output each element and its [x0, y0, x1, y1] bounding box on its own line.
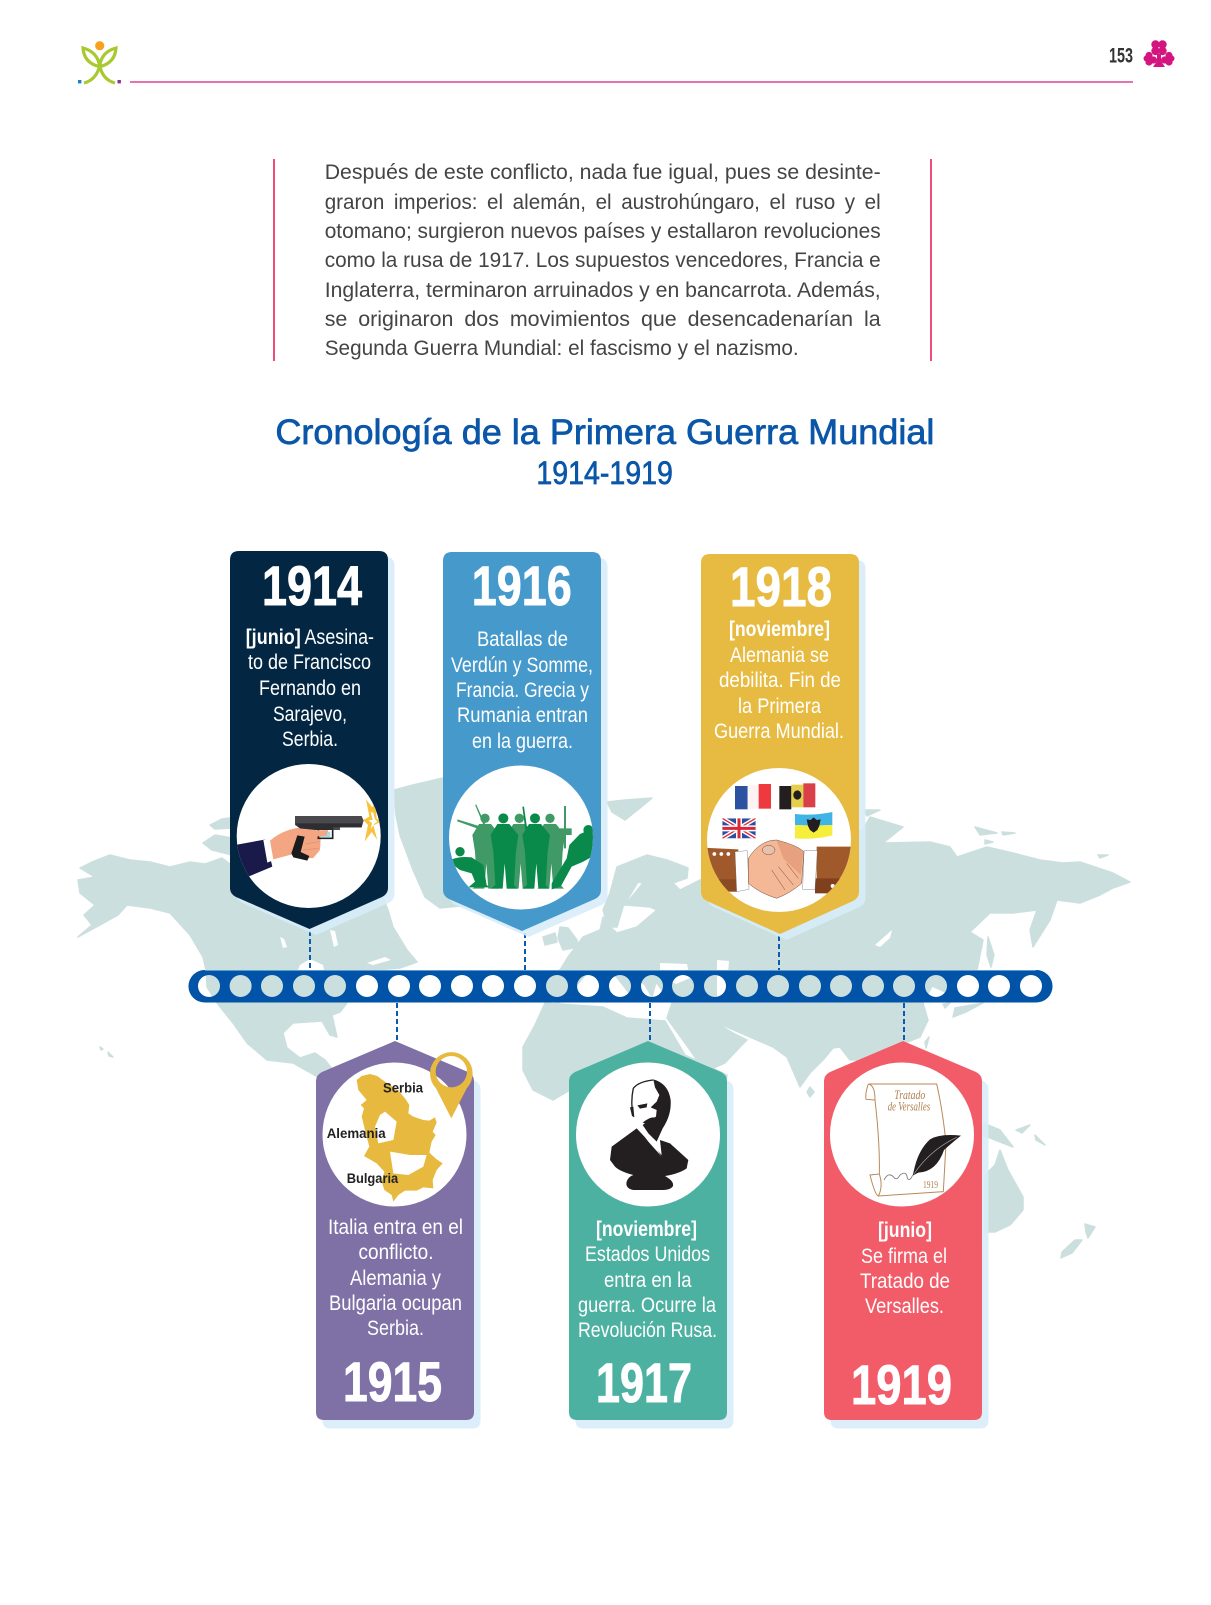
- panel: 1917: [noviembre]: [596, 1218, 697, 1241]
- panel: 1914: [junio]: [246, 626, 301, 649]
- panel: 1917: entra en la: [604, 1269, 692, 1292]
- header rule: [130, 81, 1133, 83]
- panel: 1915: Bulgaria ocupan: [329, 1292, 462, 1315]
- text block with side rules: Segunda Guerra Mundial: el fascismo y el nazismo.: [325, 336, 799, 360]
- icon: map of Serbia with pin: Serbia: [383, 1080, 423, 1096]
- page number: 153: [1109, 44, 1133, 67]
- panel: 1915: Serbia.: [367, 1317, 424, 1340]
- panel: 1917: guerra. Ocurre la: [578, 1294, 716, 1317]
- text block with side rules: graron imperios: el alemán, el austrohúngaro, el ruso y el: [325, 190, 881, 214]
- icon: soldiers silhouette: [452, 804, 595, 889]
- panel: 1919: Tratado de: [860, 1270, 950, 1293]
- icon: map of Serbia with pin: Alemania: [327, 1125, 386, 1141]
- panel: 1915: conflicto.: [358, 1241, 434, 1264]
- panel: 1915: 1915: [343, 1350, 442, 1413]
- icon: program logo: [78, 41, 121, 83]
- panel: 1917: Revolución Rusa.: [578, 1319, 717, 1342]
- panel: 1919: Se firma el: [861, 1245, 947, 1268]
- panel: 1915: [316, 1041, 480, 1428]
- panel: 1918: Guerra Mundial.: [714, 720, 844, 743]
- panel: 1919: [junio]: [878, 1219, 932, 1242]
- icon: treaty scroll with quill: Tratado: [894, 1087, 926, 1102]
- panel: 1916: Francia. Grecia y: [456, 679, 589, 702]
- panel: 1919: 1919: [851, 1353, 952, 1416]
- panel: 1914: to de Francisco: [248, 651, 371, 674]
- icon: treaty scroll with quill: de Versalles: [888, 1099, 930, 1114]
- icon: Lenin bust: [610, 1079, 688, 1190]
- text block with side rules: Después de este conflicto, nada fue igual, pues se desinte-: [325, 160, 881, 184]
- panel: 1918: [701, 554, 866, 940]
- icon: map of Serbia with pin: [327, 1052, 473, 1202]
- panel: 1916: [316, 552, 988, 1428]
- connector dashes: [310, 931, 904, 1041]
- timeline bar with dots: [188, 970, 1053, 1002]
- icon: flags and handshake: [703, 783, 857, 898]
- text block with side rules: se originaron dos movimientos que desencadenarían la: [325, 307, 881, 331]
- panel: 1915: Italia entra en el: [328, 1216, 463, 1239]
- title: [275, 413, 934, 491]
- panel: 1914: Sarajevo,: [273, 703, 347, 726]
- text block with side rules: otomano; surgieron nuevos países y estallaron revoluciones: [325, 219, 881, 243]
- panel: 1915: Alemania y: [350, 1267, 441, 1290]
- panel: 1917: Estados Unidos: [585, 1243, 710, 1266]
- text block with side rules: Inglaterra, terminaron arruinados y en bancarrota. Además,: [325, 278, 881, 302]
- panel: 1914: Fernando en: [259, 677, 361, 700]
- text block with side rules: [273, 159, 932, 361]
- panel: 1918: [noviembre]: [729, 618, 830, 641]
- panel: 1914: Serbia.: [282, 728, 338, 751]
- panel: 1916: Verdún y Somme,: [451, 654, 593, 677]
- panel: 1914: [230, 551, 394, 935]
- icon: treaty scroll with quill: 1919: [923, 1179, 938, 1191]
- panel: 1914: Asesina-: [304, 626, 374, 649]
- icon: map of Serbia with pin: Bulgaria: [347, 1170, 398, 1186]
- panel: 1919: Versalles.: [865, 1295, 944, 1318]
- text block with side rules: como la rusa de 1917. Los supuestos vencedores, Francia e: [325, 248, 881, 272]
- icon: hand firing pistol: [233, 799, 381, 879]
- panel: 1914: 1914: [262, 554, 362, 617]
- panel: 1918: 1918: [730, 555, 832, 618]
- title: Cronología de la Primera Guerra Mundial: [275, 413, 934, 452]
- panel: 1919: [824, 1041, 988, 1428]
- panel: 1916: en la guerra.: [472, 730, 573, 753]
- panel: 1916: Rumania entran: [457, 704, 588, 727]
- panel: 1916: Batallas de: [477, 628, 568, 651]
- title: 1914-1919: [536, 455, 673, 491]
- world map background: [78, 778, 1130, 1258]
- panel: 1917: 1917: [596, 1351, 692, 1414]
- panel: 1918: debilita. Fin de: [719, 669, 841, 692]
- panel: 1918: la Primera: [738, 695, 821, 718]
- icon: treaty scroll with quill: [866, 1084, 961, 1196]
- panel: 1918: Alemania se: [730, 644, 829, 667]
- panel: 1917: [569, 1041, 734, 1428]
- panel: 1916: 1916: [472, 554, 572, 617]
- icon: pink flower ornament: [1144, 40, 1174, 67]
